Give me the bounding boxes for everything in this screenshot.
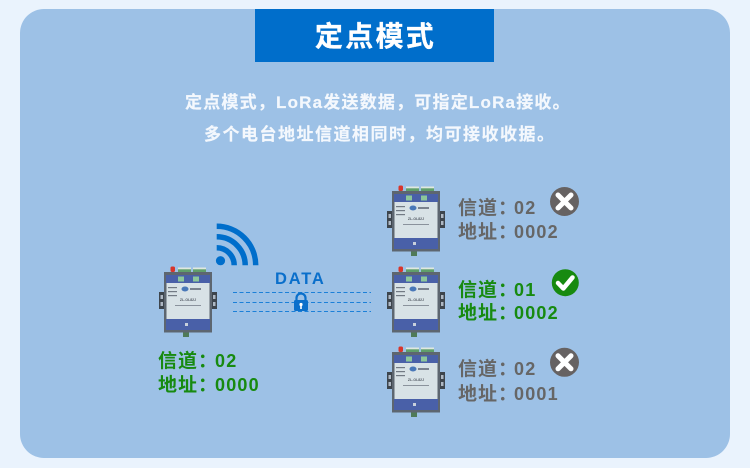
sender channel and address: 信道： [158,349,218,372]
icon: rejected cross 1 [550,187,579,216]
sender channel and address: 地址： [158,374,218,396]
receiver 1 device [387,186,445,256]
icon: lock [294,294,308,311]
icon: rejected cross 2 [550,348,579,377]
receiver 3 channel and address: 地址： [458,383,518,405]
receiver 2 channel and address: 地址： [458,302,518,324]
heading banner: 定点模式 [315,21,436,52]
heading banner [255,9,494,62]
data transmission lines [233,292,371,312]
receiver 2 channel and address [458,278,559,324]
sender channel and address: 02 [215,351,237,371]
description text [185,92,571,144]
receiver 1 channel and address: 地址： [458,221,518,243]
receiver 1 channel and address: 02 [514,198,536,218]
sender device [159,266,217,337]
receiver 2 channel and address: 信道： [458,278,518,301]
receiver 3 channel and address: 0001 [514,384,559,404]
receiver 2 device [387,266,445,337]
receiver 1 channel and address: 0002 [514,222,559,242]
receiver 2 channel and address: 01 [514,280,536,300]
sender channel and address [158,349,260,396]
icon: wifi signal [216,226,256,265]
receiver 3 device [387,346,445,417]
description text: 定点模式，LoRa发送数据，可指定LoRa接收。 [185,92,571,112]
receiver 1 channel and address: 信道： [458,196,518,219]
receiver 3 channel and address [458,357,559,405]
icon: accepted check [552,269,579,296]
description text: 多个电台地址信道相同时，均可接收收据。 [204,124,556,144]
receiver 3 channel and address: 信道： [458,357,518,380]
data label: DATA [275,270,326,288]
sender channel and address: 0000 [215,375,260,395]
receiver 3 channel and address: 02 [514,359,536,379]
receiver 1 channel and address [458,196,559,243]
receiver 2 channel and address: 0002 [514,303,559,323]
